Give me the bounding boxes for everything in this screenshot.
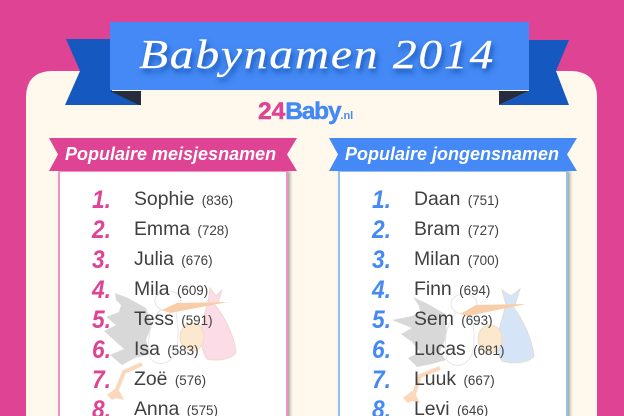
girls list: 5. bbox=[92, 306, 111, 334]
wings bbox=[104, 293, 152, 365]
girls list: 2. bbox=[91, 216, 111, 244]
boys list: Lucas (681) bbox=[414, 338, 504, 360]
bundle knot bbox=[502, 289, 520, 305]
boys list: 7. bbox=[372, 366, 391, 394]
girls list: Zoë (576) bbox=[134, 368, 206, 390]
girls list: Mila (609) bbox=[134, 278, 208, 300]
legs bbox=[414, 368, 440, 394]
panel: girls names bbox=[49, 138, 297, 416]
beak bbox=[162, 302, 228, 313]
girls list: 1. bbox=[92, 186, 111, 214]
girls list: 4. bbox=[91, 276, 111, 304]
head bbox=[155, 291, 181, 311]
title banner bbox=[110, 22, 529, 90]
girls list bbox=[91, 186, 233, 416]
panel: boys names bbox=[329, 138, 577, 416]
boys list: 1. bbox=[372, 186, 391, 214]
beak bbox=[460, 304, 526, 316]
stork illustration: boy bbox=[392, 289, 534, 403]
boys list: 3. bbox=[372, 246, 391, 274]
girls heading: Populaire meisjesnamen bbox=[65, 144, 276, 164]
legs bbox=[116, 364, 142, 392]
neck and body bbox=[148, 310, 178, 363]
boys card bbox=[339, 171, 567, 416]
girls list: Emma (728) bbox=[134, 218, 229, 240]
foot bbox=[107, 388, 124, 400]
wings bbox=[392, 297, 447, 367]
right ribbon tail bbox=[499, 40, 569, 105]
boys list: 5. bbox=[372, 306, 391, 334]
girls list: 7. bbox=[92, 366, 111, 394]
boys list: Finn (694) bbox=[414, 278, 490, 300]
baby bbox=[478, 325, 502, 353]
left ribbon tail bbox=[65, 39, 141, 105]
girls card bbox=[59, 171, 287, 416]
girls list: Julia (676) bbox=[134, 248, 213, 270]
boys list: 6. bbox=[372, 336, 391, 364]
boys list: Milan (700) bbox=[414, 248, 499, 270]
boys list: Bram (727) bbox=[414, 218, 499, 240]
girls list: 3. bbox=[92, 246, 111, 274]
boys heading: Populaire jongensnamen bbox=[345, 144, 559, 164]
girls list: 6. bbox=[92, 336, 111, 364]
boys list: 4. bbox=[371, 276, 391, 304]
boys list: Luuk (667) bbox=[414, 368, 495, 390]
boys list: Sem (693) bbox=[414, 308, 493, 330]
cream panel bbox=[26, 71, 597, 416]
boys list: Daan (751) bbox=[414, 188, 499, 210]
girls ribbon bbox=[49, 138, 297, 171]
bundle bbox=[497, 305, 534, 363]
girls list: Isa (583) bbox=[134, 338, 199, 360]
head bbox=[451, 294, 477, 314]
bundle knot bbox=[208, 288, 222, 303]
baby bbox=[180, 323, 204, 351]
stork illustration: girl bbox=[104, 288, 236, 400]
bundle bbox=[201, 303, 236, 360]
neck and body bbox=[445, 312, 474, 365]
boys list bbox=[371, 186, 504, 416]
title: Babynamen 2014 bbox=[139, 31, 495, 77]
boys ribbon bbox=[329, 138, 577, 171]
boys list: 2. bbox=[371, 216, 391, 244]
girls list: Tess (591) bbox=[134, 308, 213, 330]
logo: 24Baby.nl: 24Baby.nl bbox=[258, 98, 353, 125]
girls list: Sophie (836) bbox=[134, 188, 233, 210]
foot bbox=[403, 391, 420, 403]
